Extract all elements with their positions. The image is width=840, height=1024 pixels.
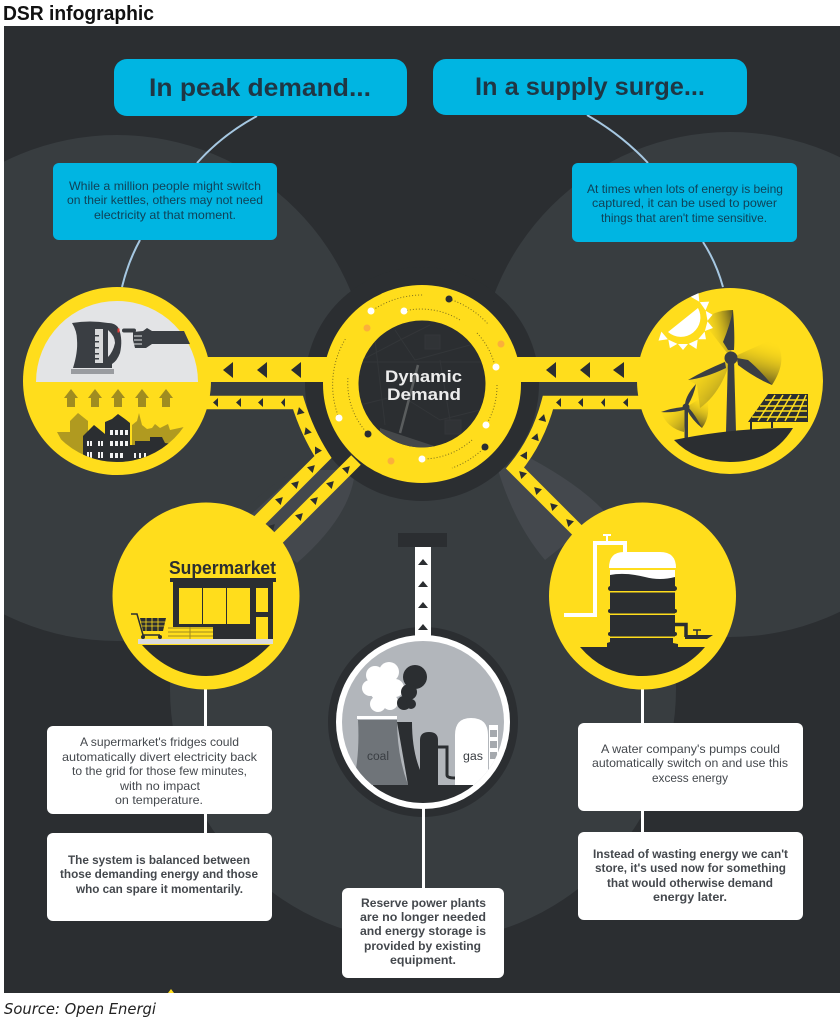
circle: wind and solar: [637, 288, 823, 474]
text box: supermarket fridges: with no impact: [119, 779, 201, 793]
icon: solar panel: [748, 394, 808, 430]
text box: supply surge explanation: [572, 163, 797, 242]
icon: coal cooling tower: [353, 720, 408, 785]
text box: instead of wasting energy: that would otherwise demand: [607, 876, 773, 890]
power plant halo: [328, 627, 518, 817]
central label: [385, 367, 462, 404]
icon: pointing hand: [118, 328, 190, 348]
icon: white water pipe: [564, 543, 625, 615]
icon: large wind turbine: [688, 310, 772, 432]
central label: Demand: [387, 385, 461, 404]
icon: white smoke: [362, 662, 404, 712]
text box: water company pumps: automatically switch on and use this: [592, 756, 788, 770]
text box: system balanced: [47, 833, 272, 921]
text box: peak demand explanation: electricity at that moment.: [94, 208, 236, 222]
icon: kettle: [71, 322, 121, 374]
text box: supermarket fridges: automatically divert electricity back: [62, 750, 258, 764]
text box: reserve power plants: provided by existing: [364, 939, 481, 953]
up arrows: [64, 389, 173, 407]
icon: sun: [655, 291, 714, 351]
icon: dark smoke: [397, 665, 427, 710]
icon: trolley: [131, 614, 166, 639]
heading: in a supply surge: In a supply surge...: [475, 73, 705, 101]
connector lines: blue: [122, 115, 723, 287]
power plant exhaust stem: [398, 533, 447, 639]
icon: benches: [168, 627, 213, 639]
text box: reserve power plants: and energy storage is: [360, 924, 486, 938]
title: DSR infographic: [3, 3, 154, 25]
circle: power plants: [336, 635, 510, 809]
circle: kettle and homes: [23, 287, 211, 475]
energy bands: [205, 370, 642, 543]
ground: [373, 785, 473, 803]
text box: reserve power plants: Reserve power plants: [361, 896, 486, 910]
street map texture: [362, 341, 482, 448]
text box: peak demand explanation: on their kettles, others may not need: [67, 193, 263, 207]
icon: store building: [170, 578, 276, 640]
label: coal: coal: [367, 751, 389, 763]
icon: tap: [603, 535, 611, 541]
text box: supermarket fridges: A supermarket's fridges could: [80, 735, 239, 749]
text box: system balanced: The system is balanced between: [68, 853, 250, 867]
heading: in a supply surge: [433, 59, 747, 115]
text box: peak demand explanation: [53, 163, 277, 240]
arrows on energy bands: [213, 362, 628, 532]
text box: instead of wasting energy: Instead of wasting energy we can't: [593, 847, 788, 861]
ground: [674, 428, 793, 462]
text box: instead of wasting energy: [578, 832, 803, 920]
icon: outlet pipe: [673, 624, 713, 639]
text box: instead of wasting energy: energy later.: [653, 890, 727, 904]
icon: water tank: [607, 552, 678, 647]
dots on ring: [336, 296, 504, 464]
text box: reserve power plants: are no longer needed: [360, 910, 486, 924]
blade shadows: [703, 310, 733, 358]
source note: Source: Open Energi: [4, 1000, 157, 1018]
circle: supermarket: [112, 502, 300, 690]
text box: instead of wasting energy: store, it's used now for something: [595, 861, 786, 875]
city skyline: [57, 413, 184, 465]
dotted arcs: [333, 295, 497, 468]
text box: supply surge explanation: At times when lots of energy is being: [587, 182, 783, 196]
star tip at panel bottom: [168, 989, 174, 993]
text box: supermarket fridges: on temperature.: [115, 793, 203, 807]
heading: in peak demand: In peak demand...: [149, 74, 371, 102]
central halo: [305, 267, 539, 501]
circle: water company: [549, 502, 736, 690]
text box: peak demand explanation: While a million people might switch: [69, 179, 261, 193]
text box: reserve power plants: equipment.: [390, 953, 456, 967]
text box: supply surge explanation: things that aren't time sensitive.: [601, 211, 767, 225]
icon: gas holder: [455, 718, 488, 785]
central circle: dynamic demand: [323, 285, 521, 483]
central label: Dynamic: [385, 367, 462, 386]
text box: supermarket fridges: [47, 726, 272, 814]
text box: supply surge explanation: captured, it can be used to power: [592, 196, 777, 210]
text box: reserve power plants: [342, 888, 504, 978]
text box: water company pumps: A water company's pumps could: [601, 742, 780, 756]
text box: water company pumps: excess energy: [652, 771, 728, 785]
supermarket sign: Supermarket: [169, 558, 276, 578]
text box: water company pumps: [578, 723, 803, 811]
heading: in peak demand: [114, 59, 407, 116]
text box: system balanced: those demanding energy and those: [60, 867, 258, 881]
text box: system balanced: who can spare it momentarily.: [75, 882, 243, 896]
white connectors: [204, 689, 644, 889]
icon: chimney and boiler: [397, 722, 438, 785]
text box: supermarket fridges: to the grid for those few minutes,: [72, 764, 247, 778]
pavement and ground: [138, 639, 273, 644]
label: gas: gas: [463, 751, 483, 763]
ground: [580, 647, 705, 676]
icon: small wind turbine: [661, 384, 702, 441]
